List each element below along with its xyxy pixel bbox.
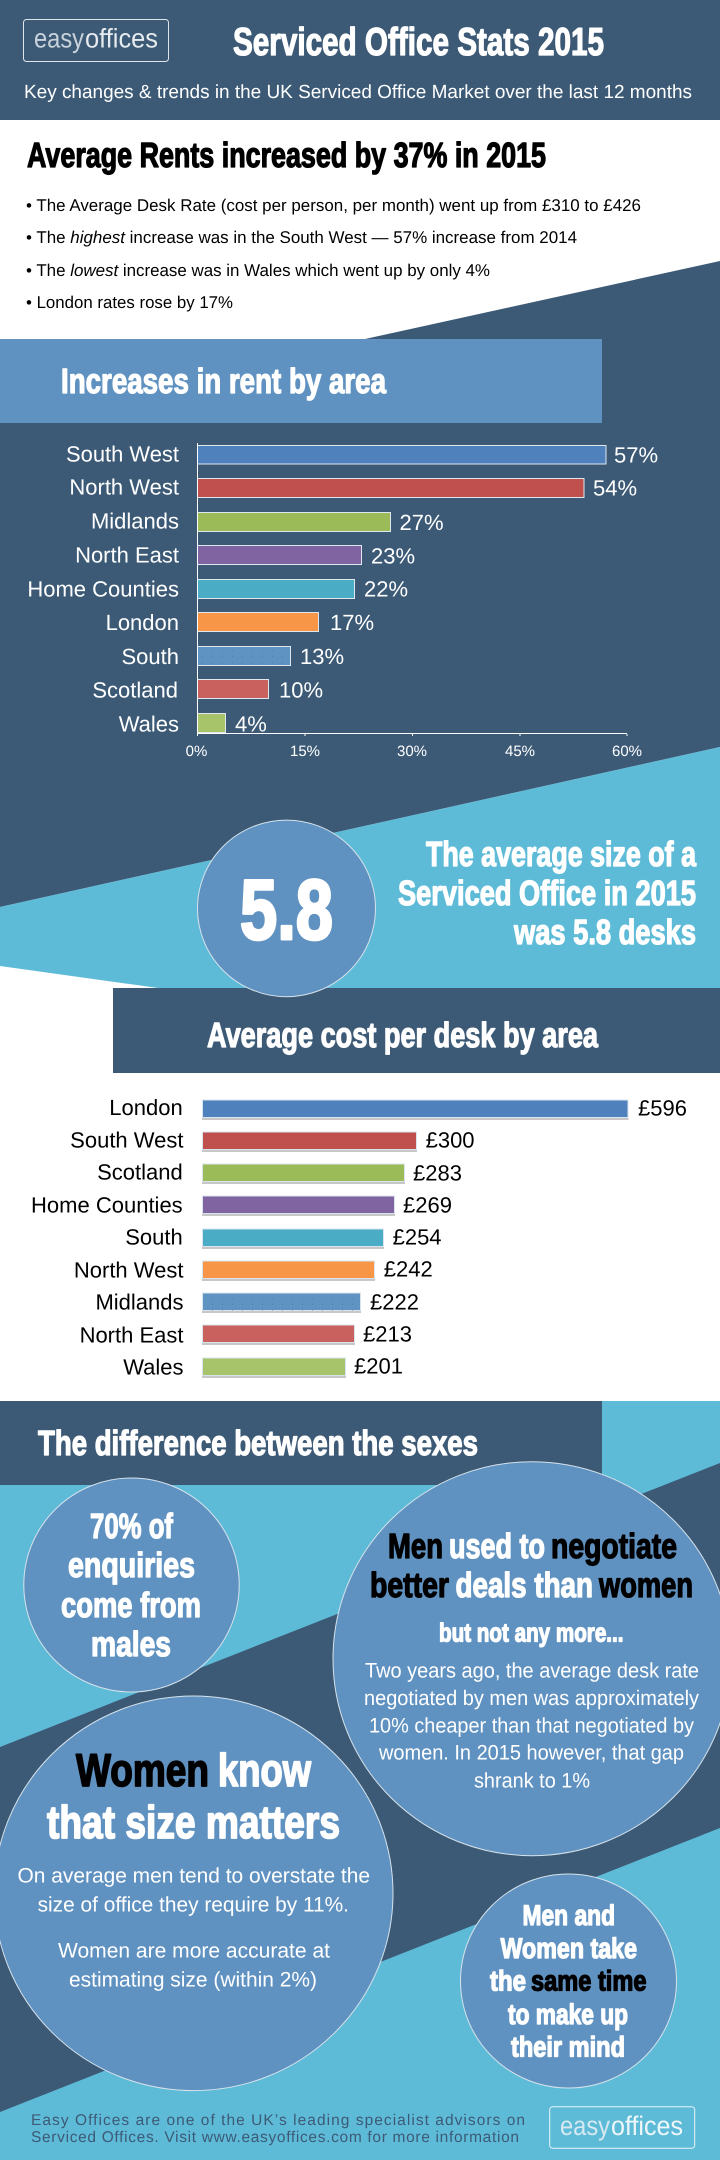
footer text — [31, 2112, 525, 2146]
subheading: but not any more: but not any more... — [439, 1618, 624, 1648]
axes — [198, 443, 627, 736]
value labels: 57% — [614, 443, 658, 468]
heading: men negotiate: negotiate — [551, 1527, 677, 1566]
category labels — [31, 1095, 184, 1380]
category labels: South West — [66, 442, 179, 467]
circle: 5.8 — [198, 820, 376, 997]
bar chart: average cost per desk — [31, 1095, 687, 1380]
circle: men and women take the same time: the — [490, 1966, 526, 1998]
value labels: 54% — [593, 476, 637, 501]
category labels: North East — [75, 543, 179, 568]
body text: size estimates: Women are more accurate at — [58, 1940, 330, 1963]
heading: men negotiate: women — [598, 1566, 693, 1605]
category labels: Scotland — [97, 1160, 183, 1185]
heading: men negotiate: better — [370, 1566, 449, 1605]
circle: men and women take the same time — [460, 1874, 676, 2088]
value labels — [235, 443, 658, 736]
body text: size estimates: On average men tend to overstate the — [18, 1865, 370, 1888]
axis tick labels: 30% — [397, 743, 427, 760]
value labels: £201 — [354, 1354, 403, 1379]
body text: negotiation gap: negotiated by men was approximately — [364, 1687, 699, 1710]
average size text — [398, 835, 696, 952]
axis tick labels: 15% — [290, 743, 320, 760]
banner: the difference between the sexes: The difference between the sexes — [38, 1424, 478, 1463]
circle: men and women take the same time: their mind — [511, 2032, 625, 2064]
category labels: Scotland — [92, 678, 178, 703]
callout: average size 5.8 desks — [198, 820, 696, 997]
bullet list: • The Average Desk Rate (cost per person, per month) went up from £310 to £426 — [26, 196, 641, 215]
value labels: £213 — [363, 1322, 412, 1347]
value labels: £596 — [638, 1096, 687, 1121]
category labels: South West — [70, 1128, 184, 1153]
heading: women know: Women — [76, 1744, 209, 1796]
value labels: 10% — [279, 677, 323, 702]
circle: 70% of enquiries: 70% of — [90, 1507, 173, 1546]
section: average rents — [26, 136, 641, 312]
footer text: Serviced Offices. Visit www.easyoffices.com for more information — [31, 2129, 519, 2146]
banner: the difference between the sexes — [0, 1401, 602, 1485]
body text: size estimates: estimating size (within 2%) — [69, 1969, 317, 1992]
circle: 70% of enquiries: enquiries — [68, 1546, 195, 1585]
category labels: Home Counties — [31, 1193, 183, 1218]
footer logo: easyoffices: offices — [611, 2111, 683, 2141]
circle: 70% of enquiries: males — [91, 1625, 171, 1664]
circle: 5.8: 5.8 — [240, 863, 333, 958]
category labels: South — [125, 1225, 183, 1250]
footer logo: easyoffices — [550, 2107, 695, 2148]
logo: easyoffices — [24, 20, 168, 62]
category labels: North West — [74, 1258, 184, 1283]
value labels: 23% — [371, 543, 415, 568]
circle: 70% of enquiries — [24, 1478, 239, 1692]
banner: increases in rent by area — [0, 339, 602, 423]
background: light blue lower section — [0, 1401, 720, 2160]
circle: men and women take the same time: same time — [531, 1966, 646, 1998]
banner: increases in rent by area: Increases in rent by area — [61, 362, 386, 401]
logo: easyoffices: easy — [34, 24, 84, 54]
bars — [202, 1100, 628, 1376]
heading: women know: that size matters — [47, 1796, 340, 1848]
footer logo: easyoffices: easy — [560, 2111, 610, 2141]
circle: 70% of enquiries: come from — [61, 1586, 201, 1625]
banner: average cost per desk: Average cost per desk by area — [207, 1016, 598, 1055]
body text: negotiation gap — [364, 1660, 699, 1793]
heading: women know: know — [218, 1744, 311, 1796]
value labels: £283 — [413, 1161, 462, 1186]
category labels: North West — [69, 475, 179, 500]
value labels: £254 — [393, 1225, 442, 1250]
bullet list: • London rates rose by 17% — [26, 293, 233, 312]
value labels: 13% — [300, 644, 344, 669]
background: dark diagonal band in lower section — [0, 1463, 720, 2112]
bullet list: • The highest increase was in the South West — 57% increase from 2014 — [26, 228, 577, 247]
bullet list: • The lowest increase was in Wales which went up by only 4% — [26, 261, 490, 280]
category labels: Wales — [123, 1355, 184, 1380]
circle: men and women take the same time: Men and — [522, 1900, 615, 1932]
category labels: Midlands — [91, 509, 179, 534]
heading: men negotiate: used to — [449, 1527, 545, 1566]
footer text: Easy Offices are one of the UK’s leading specialist advisors on — [31, 2112, 525, 2129]
bar chart: increases in rent by area — [27, 442, 658, 760]
value labels: £300 — [426, 1128, 475, 1153]
category labels: London — [109, 1095, 183, 1120]
value labels: 17% — [330, 610, 374, 635]
heading: women know — [47, 1744, 340, 1848]
value labels: £222 — [370, 1290, 419, 1315]
category labels — [27, 442, 179, 737]
category labels: London — [106, 610, 179, 635]
logo: easyoffices: offices — [85, 24, 158, 54]
circle: men and women take the same time: Women take — [500, 1933, 637, 1965]
banner: average cost per desk — [113, 988, 720, 1073]
title: Serviced Office Stats 2015 — [233, 21, 604, 64]
category labels: Wales — [119, 712, 179, 737]
circle: women know that size matters — [0, 1696, 393, 2091]
axis tick labels: 45% — [505, 743, 535, 760]
axis tick labels — [186, 743, 642, 760]
body text: size estimates: size of office they require by 11%. — [38, 1894, 349, 1917]
body text: size estimates — [18, 1865, 370, 1992]
value labels — [354, 1096, 687, 1379]
value labels: 27% — [400, 510, 444, 535]
heading: men negotiate — [370, 1527, 693, 1605]
category labels: Home Counties — [27, 577, 179, 602]
heading: men negotiate: Men — [388, 1527, 443, 1566]
category labels: North East — [80, 1323, 184, 1348]
circle: men used to negotiate — [333, 1462, 720, 1856]
heading: men negotiate: deals than — [456, 1566, 593, 1605]
heading: average rents: Average Rents increased by 37% in 2015 — [27, 136, 546, 175]
value labels: 4% — [235, 711, 267, 736]
value labels: £242 — [384, 1257, 433, 1282]
value labels: 22% — [364, 577, 408, 602]
subtitle: Key changes & trends in the UK Serviced Office Market over the last 12 months — [24, 82, 692, 103]
bullet list — [26, 196, 641, 312]
bar shadows — [202, 1102, 628, 1378]
header panel — [0, 0, 720, 120]
body text: negotiation gap: Two years ago, the average desk rate — [365, 1660, 699, 1683]
body text: negotiation gap: shrank to 1% — [474, 1770, 590, 1793]
circle: men and women take the same time: to make up — [508, 1999, 628, 2031]
category labels: South — [122, 644, 179, 669]
category labels: Midlands — [95, 1290, 184, 1315]
axis tick labels: 0% — [186, 743, 207, 760]
background: dark diagonal panel behind rent chart — [0, 261, 720, 907]
bars — [198, 446, 606, 732]
body text: negotiation gap: women. In 2015 however, that gap — [378, 1742, 684, 1764]
value labels: £269 — [403, 1193, 452, 1218]
axis tick labels: 60% — [612, 743, 642, 760]
background: light blue diagonal band behind average size — [0, 747, 720, 988]
body text: negotiation gap: 10% cheaper than that negotiated by — [369, 1715, 694, 1738]
